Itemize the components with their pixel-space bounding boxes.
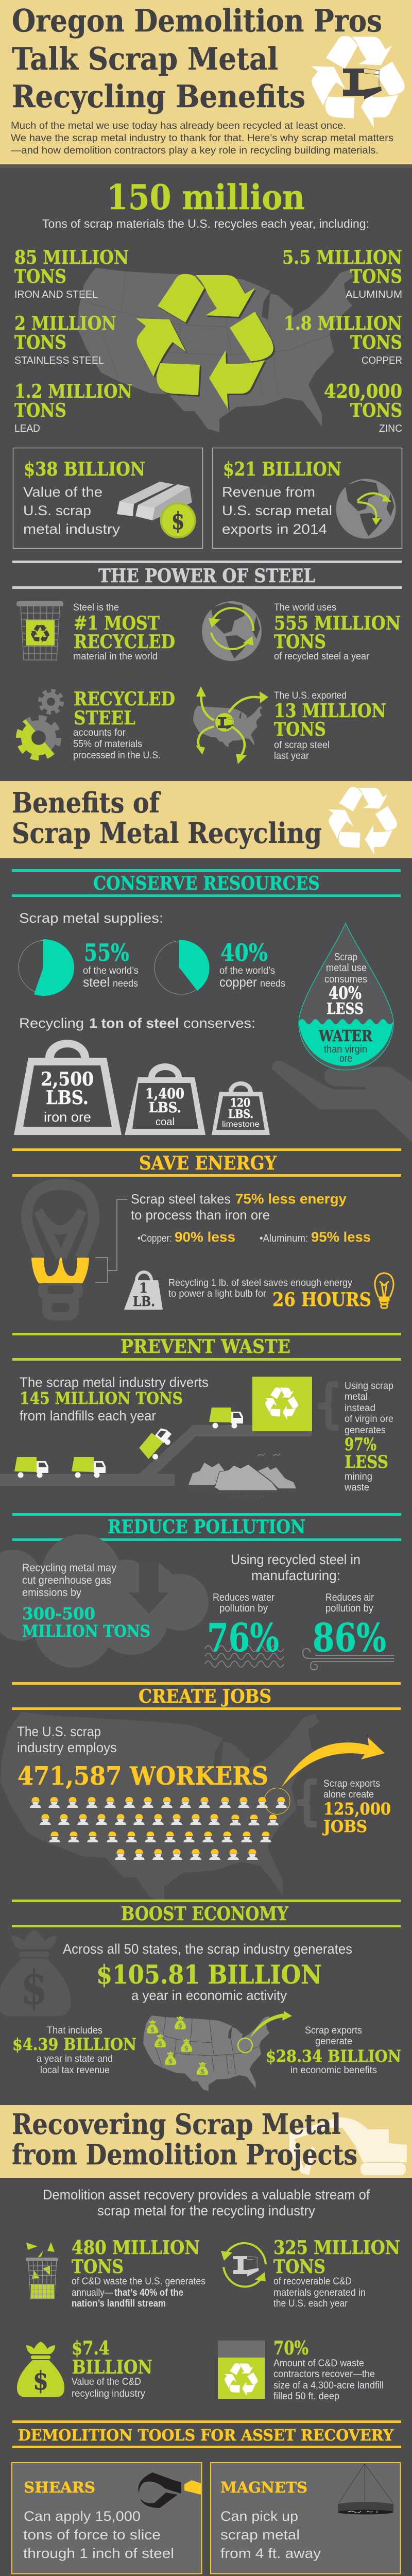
heading: prevent waste — [12, 1333, 401, 1361]
icon: weight 1,400 lbs coal — [125, 1063, 205, 1135]
stat: $7.4 billion: BILLION — [72, 2357, 152, 2378]
icon: globe with export arrows — [336, 479, 396, 539]
panel: title banner — [0, 0, 412, 168]
text: recycling 1 lb of steel — [168, 1278, 371, 1311]
stats: metal tonnages: 2 MILLION — [14, 313, 116, 334]
stat: 70%: filled 50 ft. deep — [273, 2391, 339, 2402]
icon: water drop with stat: metal use — [326, 962, 367, 974]
chart: 55% pie: steel — [83, 974, 110, 990]
text: $4.39 billion tax revenue: a year in state and — [37, 2054, 113, 2064]
text: $28.34 billion economic benefits: $28.34 BILLION — [266, 2046, 401, 2066]
heading: reduce pollution: REDUCE POLLUTION — [108, 1516, 305, 1538]
panel: $38 billion industry value: U.S. scrap — [23, 503, 91, 518]
panel: magnets: from 4 ft. away — [220, 2546, 321, 2561]
stat: 480 million tons: that’s 40% of the — [114, 2287, 183, 2298]
text: $28.34 billion economic benefits — [266, 2025, 401, 2076]
map: US with money bags: $ — [184, 2045, 189, 2053]
icon: background hand — [272, 1061, 412, 1142]
stat: 325 million tons: the U.S. each year — [273, 2298, 348, 2309]
heading: benefits of scrap metal recycling — [12, 786, 322, 850]
illustration: mountains of mining waste — [188, 1453, 296, 1496]
icon: water drop with stat: ore — [339, 1053, 352, 1064]
map: US with money bags: $ — [150, 2026, 155, 2034]
heading: recovering scrap metal from demolition projects — [12, 2108, 357, 2171]
intro text — [11, 121, 393, 156]
text: workers employed: The U.S. scrap — [17, 1724, 101, 1739]
heading: the power of steel — [12, 561, 402, 589]
text: greenhouse gas reduction — [22, 1562, 150, 1641]
stat: #1 most recycled: material in the world — [73, 651, 158, 662]
stats: metal tonnages: 1.2 MILLION — [14, 381, 132, 402]
background map — [0, 1712, 319, 1902]
stat: 555 million tons: of recycled steel a year — [274, 651, 370, 662]
heading: benefits of scrap metal recycling: Scrap Metal Recycling — [12, 817, 322, 850]
stat: air pollution 86%: Reduces air — [325, 1592, 374, 1603]
stat: 70% — [273, 2337, 384, 2402]
stat: water pollution 76%: pollution by — [219, 1603, 268, 1614]
icon: weight 120 lbs limestone: LBS. — [228, 1108, 253, 1121]
subheading: Tons of scrap materials the U.S. recycles each year, including: — [42, 217, 369, 230]
text: greenhouse gas reduction: Recycling metal may — [22, 1562, 116, 1574]
icon: white recycling symbol with steel beam — [311, 36, 405, 128]
stats: metal tonnages: TONS — [14, 332, 66, 353]
icon: waste bin with debris — [26, 2242, 58, 2299]
heading: boost economy — [12, 1900, 401, 1927]
stat: air pollution 86%: pollution by — [325, 1603, 373, 1614]
icon: weight 120 lbs limestone: limestone — [222, 1120, 260, 1129]
text: 97% less mining waste: of virgin ore — [345, 1414, 393, 1425]
panel: conserve resources — [12, 869, 412, 1142]
icon: steel beam with recycling arrows — [221, 2243, 266, 2286]
panel: shears: through 1 inch of steel — [23, 2546, 174, 2561]
panel: magnets: scrap metal — [220, 2527, 300, 2543]
text: recycling 1 ton of steel conserves: Recycling — [19, 1015, 84, 1031]
stats: metal tonnages: COPPER — [362, 355, 402, 366]
panel: benefits banner — [0, 781, 412, 858]
stat: 13 million tons: 13 MILLION — [274, 700, 386, 722]
heading: create jobs: CREATE JOBS — [139, 1686, 271, 1707]
text: 97% less mining waste: generates — [345, 1425, 386, 1436]
stat: #1 most recycled: Steel is the — [73, 602, 119, 613]
text: using recycled steel in manufacturing: manufacturing: — [251, 1568, 340, 1583]
chart: 40% pie: 40% — [220, 939, 268, 967]
stats: metal tonnages — [14, 247, 402, 434]
stat: $7.4 billion: $7.4 — [72, 2337, 110, 2359]
text: $28.34 billion economic benefits: Scrap exports — [305, 2025, 362, 2036]
stat: 13 million tons: of scrap steel — [274, 740, 330, 751]
text: 97% less mining waste: metal — [345, 1392, 368, 1402]
icon: weight 2,500 lbs iron ore: iron ore — [44, 1109, 91, 1125]
icon: silver bars and coin: $ — [171, 507, 185, 535]
stat: 70%: Amount of C&D waste — [273, 2358, 364, 2369]
icon: demolition shears — [138, 2472, 201, 2508]
stat: 70%: size of a 4,300-acre landfill — [273, 2380, 384, 2391]
stat: 13 million tons: The U.S. exported — [274, 690, 347, 701]
heading: 150 million: 150 million — [107, 177, 305, 217]
stat: 325 million tons — [273, 2237, 400, 2309]
illustration: road with trucks to recycling — [0, 1377, 312, 1486]
stat: 325 million tons: materials generated in — [273, 2287, 366, 2298]
heading: recovering scrap metal from demolition projects: Recovering Scrap Metal — [12, 2108, 341, 2141]
bracket — [318, 1384, 338, 1428]
stat: #1 most recycled: RECYCLED — [74, 631, 175, 653]
icon: 70% filled recycling gauge — [218, 2341, 265, 2399]
text: recycling 1 lb of steel: to power a light bulb for — [168, 1289, 267, 1299]
icon: weight 1,400 lbs coal: LBS. — [149, 1100, 181, 1116]
text: 97% less mining waste — [344, 1381, 393, 1493]
stats: metal tonnages: ZINC — [379, 423, 402, 434]
panel: shears — [12, 2463, 202, 2574]
text: recycling 1 ton of steel conserves — [19, 1015, 255, 1031]
text: $105.81 billion: a year in economic activity — [131, 1988, 287, 2003]
panel: $21 billion exports — [212, 448, 402, 548]
text: scrap steel takes 75% less energy: •Aluminum: — [260, 1233, 308, 1244]
text: 97% less mining waste: Using scrap — [345, 1381, 393, 1392]
icon: weight 120 lbs limestone: 120 — [230, 1096, 250, 1110]
callout bracket lines — [95, 1199, 127, 1282]
icon: US map with export arrows — [193, 686, 268, 764]
heading: recovering scrap metal from demolition projects: from Demolition Projects — [12, 2138, 357, 2171]
intro text: Much of the metal we use today has already been recycled at least once. — [11, 121, 346, 131]
stat: 480 million tons: annually— — [72, 2287, 113, 2298]
stats: metal tonnages: 420,000 — [324, 381, 402, 402]
stat: air pollution 86%: 86% — [313, 1615, 386, 1660]
text: scrap steel takes 75% less energy: 95% less — [311, 1229, 371, 1245]
text: 125,000 jobs: JOBS — [322, 1817, 367, 1836]
text: $105.81 billion: Across all 50 states, the scrap industry generates — [63, 1941, 352, 1957]
icon: weight 2,500 lbs iron ore — [14, 1040, 122, 1135]
stats: metal tonnages: TONS — [350, 400, 402, 421]
illustration: cloud with down arrow — [0, 1534, 209, 1668]
title: Talk Scrap Metal — [12, 41, 278, 77]
panel: $38 billion industry value: Value of the — [23, 484, 102, 500]
callout ring and export arrow — [264, 1737, 385, 1815]
stat: 555 million tons: 555 MILLION — [274, 613, 401, 634]
text: intro: Demolition asset recovery provides a valuable stream of — [43, 2187, 370, 2202]
panel: boost economy — [0, 1900, 401, 2091]
stat: #1 most recycled: #1 MOST — [74, 613, 160, 634]
chart: 55% pie: 55% — [84, 939, 129, 967]
text: 97% less mining waste: mining — [345, 1471, 372, 1482]
panel: magnets: MAGNETS — [220, 2479, 307, 2496]
stat: $7.4 billion: recycling industry — [72, 2388, 145, 2399]
stats: metal tonnages: TONS — [350, 266, 402, 287]
map: US with money bags — [143, 2011, 292, 2091]
text: recycling 1 ton of steel conserves: 1 ton of steel — [89, 1015, 179, 1031]
panel: magnets — [211, 2463, 401, 2574]
icon: excavator silhouette — [289, 2117, 407, 2175]
stat: recycled steel — [73, 688, 175, 761]
panel: prevent waste — [0, 1333, 401, 1496]
stat: 480 million tons: nation’s landfill stream — [72, 2298, 166, 2309]
stats: metal tonnages: TONS — [350, 332, 402, 353]
panel: save energy — [12, 1148, 401, 1320]
text: $4.39 billion tax revenue: That includes — [47, 2025, 102, 2036]
icon: water drop with stat: than virgin — [324, 1044, 367, 1055]
stat: 13 million tons: TONS — [274, 719, 326, 740]
icon: 1 lb weight: LB. — [133, 1294, 155, 1310]
text: scrap steel takes 75% less energy — [131, 1191, 371, 1245]
text: 145 million tons diverted: 145 MILLION TONS — [20, 1388, 183, 1408]
panel: $21 billion exports: Revenue from — [222, 484, 315, 500]
icon: large lime recycling symbol — [136, 274, 275, 411]
text: $4.39 billion tax revenue — [12, 2025, 136, 2076]
icon: background money bag — [0, 1930, 71, 2016]
panel: shears: SHEARS — [24, 2479, 95, 2496]
icon: globe with circular arrows — [202, 601, 262, 661]
text: scrap steel takes 75% less energy: •Copper: — [138, 1233, 172, 1244]
stat: 325 million tons: of recoverable C&D — [273, 2276, 352, 2287]
panel: the power of steel — [12, 561, 402, 764]
stat: water pollution 76% — [207, 1592, 279, 1660]
heading: demolition tools — [12, 2420, 401, 2448]
icon: water drop with stat: 40% — [329, 983, 362, 1004]
stats: metal tonnages: LEAD — [14, 423, 40, 434]
icon: 1 lb weight: 1 — [139, 1281, 148, 1296]
text: 125,000 jobs: Scrap exports — [323, 1778, 380, 1789]
icon: water drop with stat — [299, 923, 393, 1070]
icon: crane magnet — [338, 2464, 393, 2514]
text: $105.81 billion — [63, 1941, 352, 2003]
text: greenhouse gas reduction: emissions by — [22, 1587, 81, 1599]
text: workers employed: industry employs — [17, 1740, 117, 1755]
chart: 40% pie — [154, 939, 285, 994]
stat: recycled steel: RECYCLED — [74, 688, 175, 710]
heading: save energy — [12, 1148, 401, 1177]
text: scrap steel takes 75% less energy: to process than iron ore — [131, 1207, 270, 1223]
text: recycling 1 ton of steel conserves: conserves: — [183, 1015, 255, 1031]
icon: lime money bag: $ — [33, 2365, 48, 2396]
text: using recycled steel in manufacturing — [231, 1552, 360, 1583]
text: scrap steel takes 75% less energy: 90% less — [175, 1229, 235, 1245]
text: 145 million tons diverted: The scrap metal industry diverts — [20, 1375, 209, 1390]
map: US with money bags: $ — [178, 2022, 183, 2030]
stat: 480 million tons: of C&D waste the U.S. generates — [72, 2276, 205, 2287]
icon: white recycling symbol — [329, 787, 397, 855]
text: 125,000 jobs — [322, 1778, 391, 1836]
stats: metal tonnages: IRON AND STEEL — [14, 289, 98, 300]
text: 125,000 jobs: 125,000 — [323, 1799, 391, 1819]
stat: 480 million tons: 480 MILLION — [72, 2237, 200, 2259]
icon: recycling bin — [16, 601, 63, 660]
text: recycling 1 lb of steel: Recycling 1 lb. of steel saves enough energy — [168, 1278, 352, 1289]
heading: prevent waste: PREVENT WASTE — [121, 1336, 290, 1358]
heading: save energy: SAVE ENERGY — [139, 1153, 277, 1174]
text: scrap steel takes 75% less energy: Scrap steel takes — [131, 1191, 231, 1207]
stat: recycled steel: accounts for — [73, 727, 126, 738]
icon: water waves — [205, 1646, 284, 1667]
icon: 1 lb weight — [124, 1270, 163, 1310]
stat: 555 million tons: The world uses — [274, 602, 336, 613]
text: $105.81 billion: $105.81 BILLION — [96, 1959, 322, 1990]
text: $28.34 billion economic benefits: in economic benefits — [290, 2065, 377, 2076]
text: scrap metal supplies: Scrap metal supplies: — [19, 910, 163, 926]
stat: 480 million tons: TONS — [72, 2256, 124, 2278]
stat: air pollution 86% — [313, 1592, 386, 1660]
stat: $7.4 billion: Value of the C&D — [72, 2377, 141, 2387]
stat: #1 most recycled — [73, 602, 175, 662]
panel: 150 million tons overview — [13, 177, 402, 548]
panel: create jobs — [0, 1682, 401, 1902]
heading: demolition tools: DEMOLITION TOOLS FOR ASSET RECOVERY — [18, 2427, 394, 2445]
icon: weight 2,500 lbs iron ore: LBS. — [46, 1087, 89, 1109]
panel: $38 billion industry value — [13, 448, 203, 548]
stat: $7.4 billion — [72, 2337, 152, 2399]
text: $4.39 billion tax revenue: local tax revenue — [40, 2065, 110, 2076]
text: using recycled steel in manufacturing: Using recycled steel in — [231, 1552, 360, 1567]
stat: water pollution 76%: 76% — [207, 1615, 279, 1660]
icon: silver bars and coin — [117, 482, 196, 538]
chart: 55% pie — [19, 939, 139, 996]
text: greenhouse gas reduction: 300-500 — [22, 1604, 95, 1623]
icon: background money bag: $ — [21, 1960, 47, 2015]
icon: wind lines — [303, 1649, 394, 1670]
heading: boost economy: BOOST ECONOMY — [121, 1903, 289, 1925]
icon: water drop with stat: Scrap — [334, 952, 357, 963]
icon: water drop with stat: consumes — [324, 974, 367, 985]
stat: 325 million tons: TONS — [273, 2256, 325, 2278]
chart: 40% pie: copper — [219, 974, 257, 990]
stat: 325 million tons: 325 MILLION — [273, 2237, 400, 2259]
text: 145 million tons diverted: from landfills each year — [20, 1408, 156, 1423]
icon: weight 2,500 lbs iron ore: 2,500 — [41, 1069, 94, 1090]
heading: reduce pollution — [12, 1513, 401, 1541]
chart: 55% pie: needs — [113, 978, 138, 989]
panel: demolition tools for asset recovery — [12, 2420, 401, 2574]
heading: benefits of scrap metal recycling: Benefits of — [12, 786, 161, 819]
stat: 70%: contractors recover—the — [273, 2369, 375, 2380]
map: US with money bags: $ — [200, 2068, 205, 2076]
chart: 40% pie: needs — [260, 978, 285, 989]
icon: water drop with stat: WATER — [318, 1027, 373, 1045]
panel: shears: tons of force to slice — [23, 2527, 161, 2543]
heading: create jobs — [12, 1682, 401, 1710]
text: intro: scrap metal for the recycling industry — [97, 2203, 315, 2218]
heading: conserve resources — [12, 869, 401, 897]
stat: 555 million tons — [274, 602, 401, 662]
icon: weight 120 lbs limestone — [212, 1081, 270, 1135]
icons: rows of workers in hard hats — [30, 1797, 287, 1860]
icon: large light bulb — [27, 1184, 94, 1320]
icon: gears — [19, 691, 62, 758]
stat: recycled steel: 55% of materials — [73, 739, 142, 750]
text: 97% less mining waste: instead — [345, 1403, 375, 1414]
bracket — [297, 1782, 317, 1824]
text: 97% less mining waste: 97% — [345, 1434, 376, 1455]
stats: metal tonnages: TONS — [14, 266, 66, 287]
map: US with money bags: $ — [168, 2058, 173, 2065]
text: $4.39 billion tax revenue: $4.39 BILLION — [12, 2035, 136, 2054]
stats: metal tonnages: STAINLESS STEEL — [14, 355, 104, 366]
stat: recycled steel: STEEL — [74, 707, 135, 729]
icon: lime money bag — [17, 2342, 64, 2397]
panel: $38 billion industry value: metal industry — [23, 521, 121, 537]
panel: magnets: Can pick up — [220, 2509, 298, 2524]
chart: 40% pie: of the world’s — [219, 965, 275, 976]
icon: weight 1,400 lbs coal: coal — [156, 1116, 175, 1128]
stat: recycled steel: processed in the U.S. — [73, 750, 161, 761]
icon: weight 1,400 lbs coal: 1,400 — [145, 1086, 184, 1102]
panel: $21 billion exports: exports in 2014 — [222, 521, 327, 537]
map: United States — [77, 268, 353, 432]
icon: small yellow bulb — [375, 1273, 393, 1308]
intro text: —and how demolition contractors play a key role in recycling building materials. — [11, 145, 379, 156]
stat: 13 million tons: last year — [274, 751, 310, 761]
stats: metal tonnages: ALUMINUM — [346, 289, 402, 300]
stat: 13 million tons — [274, 690, 386, 761]
panel: shears: Can apply 15,000 — [24, 2509, 141, 2524]
text: workers employed — [17, 1724, 268, 1791]
map: US with money bags: $ — [158, 2040, 163, 2048]
stat: 70%: 70% — [273, 2337, 308, 2359]
panel: reduce pollution — [0, 1513, 401, 1670]
text: greenhouse gas reduction: MILLION TONS — [22, 1621, 150, 1641]
heading: conserve resources: CONSERVE RESOURCES — [93, 873, 320, 894]
icon: water drop with stat: LESS — [327, 1000, 364, 1018]
panel: $21 billion exports: U.S. scrap metal — [222, 503, 332, 518]
text: workers employed: 471,587 WORKERS — [18, 1761, 268, 1791]
chart: 55% pie: of the world’s — [83, 965, 139, 976]
panel: $38 billion industry value: $38 BILLION — [24, 459, 145, 480]
stat: 480 million tons — [72, 2237, 205, 2309]
stat: water pollution 76%: Reduces water — [213, 1592, 274, 1603]
heading: the power of steel: THE POWER OF STEEL — [98, 565, 315, 587]
stats: metal tonnages: 85 MILLION — [14, 247, 129, 268]
text: intro — [43, 2187, 370, 2218]
text: 145 million tons diverted — [20, 1375, 209, 1423]
panel: demolition asset recovery stats — [17, 2187, 400, 2402]
panel: recovering scrap metal banner — [0, 2105, 412, 2178]
text: scrap steel takes 75% less energy: 75% less energy — [235, 1191, 347, 1207]
text: 97% less mining waste: LESS — [345, 1452, 388, 1472]
text: $28.34 billion economic benefits: generate — [315, 2036, 352, 2047]
stat: 555 million tons: TONS — [274, 631, 326, 653]
text: 97% less mining waste: waste — [344, 1482, 369, 1493]
title — [12, 3, 382, 115]
text: greenhouse gas reduction: cut greenhouse gas — [22, 1574, 111, 1586]
panel: $21 billion exports: $21 BILLION — [223, 459, 341, 480]
text: recycling 1 lb of steel: 26 HOURS — [272, 1289, 371, 1311]
stats: metal tonnages: TONS — [14, 400, 66, 421]
text: 125,000 jobs: alone create — [323, 1789, 374, 1800]
intro text: We have the scrap metal industry to thank for that. Here’s why scrap metal matters — [11, 133, 393, 144]
title: Recycling Benefits — [12, 79, 305, 115]
